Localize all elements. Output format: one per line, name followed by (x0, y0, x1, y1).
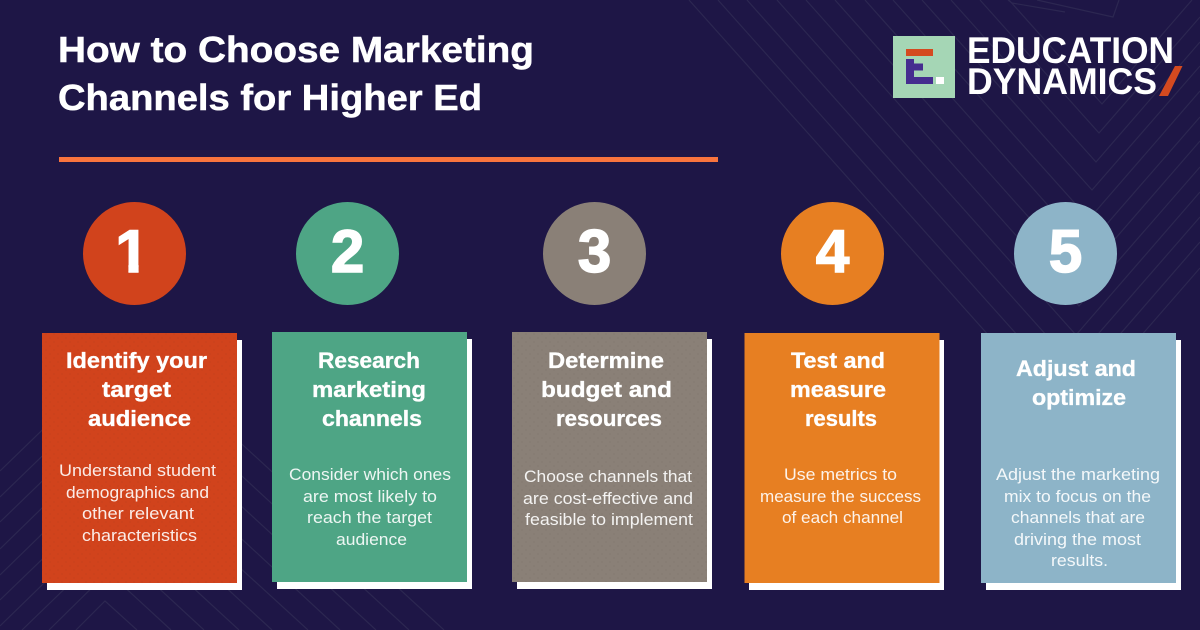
step 5 description: Adjust the marketing (996, 465, 1160, 484)
step 2 description: Consider which ones (289, 465, 451, 484)
step 4 heading: results (805, 406, 877, 431)
step 2 heading: Research (318, 348, 420, 373)
step 2 heading: marketing (312, 377, 426, 402)
step 5 description: driving the most (1014, 530, 1141, 549)
title: How to Choose Marketing (58, 29, 534, 70)
step 1 description (59, 461, 216, 545)
step 2 description (289, 465, 451, 549)
logo wordmark: DYNAMICS (967, 61, 1157, 102)
panel: step 2 research marketing channels (272, 332, 472, 589)
step 5 number circle (1014, 202, 1117, 305)
panel: step 3 determine budget and resources (512, 332, 712, 589)
step 4 description (760, 465, 921, 527)
panel: step 1 identify your target audience (42, 333, 242, 590)
step 3 description: Choose channels that (524, 467, 692, 486)
step 1 heading: Identify your (66, 348, 207, 373)
step 1 heading: target (102, 377, 172, 402)
step 2 number circle: 2 (331, 218, 364, 285)
step 3 description (523, 467, 693, 529)
title (58, 29, 534, 118)
logo: Education Dynamics (893, 30, 1182, 102)
step 4 description: of each channel (782, 508, 903, 527)
step 1 description: other relevant (82, 504, 194, 523)
step 3 heading: Determine (548, 348, 664, 373)
step 5 number circle: 5 (1049, 218, 1082, 285)
step 1 heading: audience (88, 406, 191, 431)
step 4 heading: Test and (791, 348, 885, 373)
step 3 number circle: 3 (578, 218, 611, 285)
step 2 number circle (296, 202, 399, 305)
step 2 description: reach the target (307, 508, 432, 527)
logo wordmark: EDUCATION (967, 30, 1174, 71)
step 1 description: characteristics (82, 526, 197, 545)
step 2 description: are most likely to (303, 487, 437, 506)
step 4 heading: measure (790, 377, 886, 402)
title underline (59, 157, 718, 162)
logo slash (1159, 66, 1182, 96)
panel: step 5 adjust and optimize (981, 333, 1181, 590)
step 2 heading: channels (322, 406, 422, 431)
step 4 description: Use metrics to (784, 465, 897, 484)
step 1 heading (66, 348, 207, 431)
step 4 description: measure the success (760, 487, 921, 506)
panel: step 4 test and measure results (744, 333, 944, 590)
step 1 number circle: 1 (115, 218, 149, 285)
step 1 description: demographics and (66, 483, 209, 502)
title: Channels for Higher Ed (58, 77, 482, 118)
step 3 description: feasible to implement (525, 510, 693, 529)
step 5 description: channels that are (1011, 508, 1145, 527)
logo mark (893, 36, 955, 98)
step 3 description: are cost-effective and (523, 489, 693, 508)
step 4 number circle (781, 202, 884, 305)
step 5 description: mix to focus on the (1004, 487, 1151, 506)
step 3 heading (541, 348, 672, 431)
step 2 description: audience (336, 530, 407, 549)
step 4 number circle: 4 (816, 218, 850, 285)
step 5 heading: Adjust and (1016, 356, 1136, 381)
logo wordmark (967, 30, 1174, 102)
step 5 heading (1016, 356, 1136, 410)
step 5 description (996, 465, 1160, 570)
step 1 description: Understand student (59, 461, 216, 480)
step 5 heading: optimize (1032, 385, 1126, 410)
step 3 number circle (543, 202, 646, 305)
step 3 heading: budget and (541, 377, 672, 402)
step 5 description: results. (1051, 551, 1108, 570)
step 2 heading (312, 348, 426, 431)
step 4 heading (790, 348, 886, 431)
step 1 number circle (83, 202, 186, 305)
step 3 heading: resources (556, 406, 662, 431)
